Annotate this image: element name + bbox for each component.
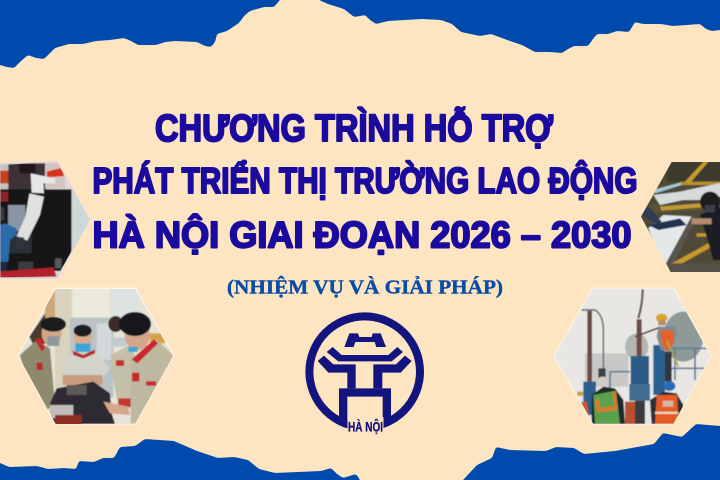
bottom left torn-paper banner xyxy=(0,439,362,480)
photo hexagon: construction workers on a drilling rig xyxy=(550,287,713,427)
photo hexagon: factory workers at a glass table xyxy=(640,160,720,273)
top right torn-paper banner xyxy=(316,0,720,53)
top torn-paper banner xyxy=(0,0,283,68)
bottom right torn-paper banner xyxy=(456,424,720,480)
logo label: HÀ NỘI xyxy=(348,418,383,434)
photo hexagon: students repairing an engine xyxy=(13,287,177,427)
logo label backing xyxy=(348,417,384,434)
title xyxy=(92,105,638,256)
title line 3: HÀ NỘI GIAI ĐOẠN 2026 – 2030 xyxy=(92,214,632,256)
logo ring xyxy=(309,316,420,427)
title line 1: CHƯƠNG TRÌNH HỖ TRỢ xyxy=(155,105,553,150)
logo: Hà Nội Khuê Văn Các emblem xyxy=(309,316,420,434)
photo hexagon: robot arm machine operator xyxy=(0,160,93,280)
subtitle: (NHIỆM VỤ VÀ GIẢI PHÁP) xyxy=(227,276,503,298)
logo gate xyxy=(318,333,412,424)
